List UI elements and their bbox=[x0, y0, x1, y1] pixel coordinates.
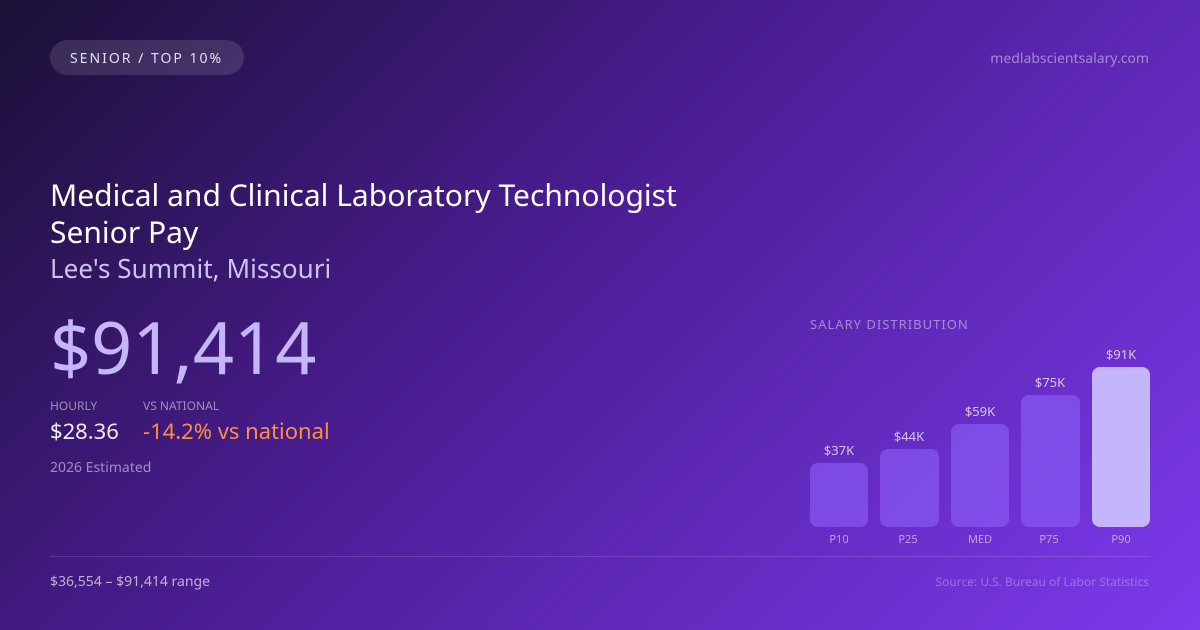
value: $59K bbox=[965, 402, 995, 420]
badge: senior / top 10%: SENIOR / TOP 10% bbox=[70, 49, 223, 68]
label: P25 bbox=[898, 532, 918, 547]
stat: vs national bbox=[143, 397, 330, 446]
title: Senior Pay bbox=[50, 211, 198, 252]
bar P10 bbox=[810, 441, 868, 547]
site domain: medlabscientsalary.com bbox=[990, 49, 1149, 68]
bar chart bbox=[810, 345, 1150, 547]
bar bbox=[880, 449, 939, 527]
value: $44K bbox=[894, 427, 924, 445]
value: $91K bbox=[1106, 345, 1136, 363]
bar bbox=[1092, 367, 1150, 527]
bar P75 bbox=[1021, 373, 1080, 547]
stat: hourly bbox=[50, 397, 119, 446]
label: P90 bbox=[1111, 532, 1131, 547]
estimate note: 2026 Estimated bbox=[50, 458, 151, 477]
hourly value: $28.36 bbox=[50, 416, 119, 446]
value: $75K bbox=[1035, 373, 1065, 391]
badge: senior / top 10% bbox=[50, 40, 244, 75]
bar P90 bbox=[1092, 345, 1150, 547]
salary range: $36,554 – $91,414 range bbox=[50, 572, 210, 591]
label: MED bbox=[968, 532, 992, 547]
vs national value: -14.2% vs national bbox=[143, 416, 330, 446]
headline salary: $91,414 bbox=[50, 298, 316, 396]
value: $37K bbox=[824, 441, 854, 459]
hourly label: HOURLY bbox=[50, 397, 97, 414]
chart heading: SALARY DISTRIBUTION bbox=[810, 315, 969, 333]
title: Medical and Clinical Laboratory Technologist bbox=[50, 174, 677, 215]
bar bbox=[951, 424, 1009, 527]
bar median bbox=[951, 402, 1009, 547]
vs national label: VS NATIONAL bbox=[143, 397, 219, 414]
label: P10 bbox=[829, 532, 849, 547]
location subtitle: Lee's Summit, Missouri bbox=[50, 250, 331, 286]
source: Source: U.S. Bureau of Labor Statistics bbox=[936, 573, 1149, 590]
label: P75 bbox=[1039, 532, 1059, 547]
bar bbox=[1021, 395, 1080, 527]
bar P25 bbox=[880, 427, 939, 547]
bar bbox=[810, 463, 868, 527]
title bbox=[50, 174, 677, 252]
